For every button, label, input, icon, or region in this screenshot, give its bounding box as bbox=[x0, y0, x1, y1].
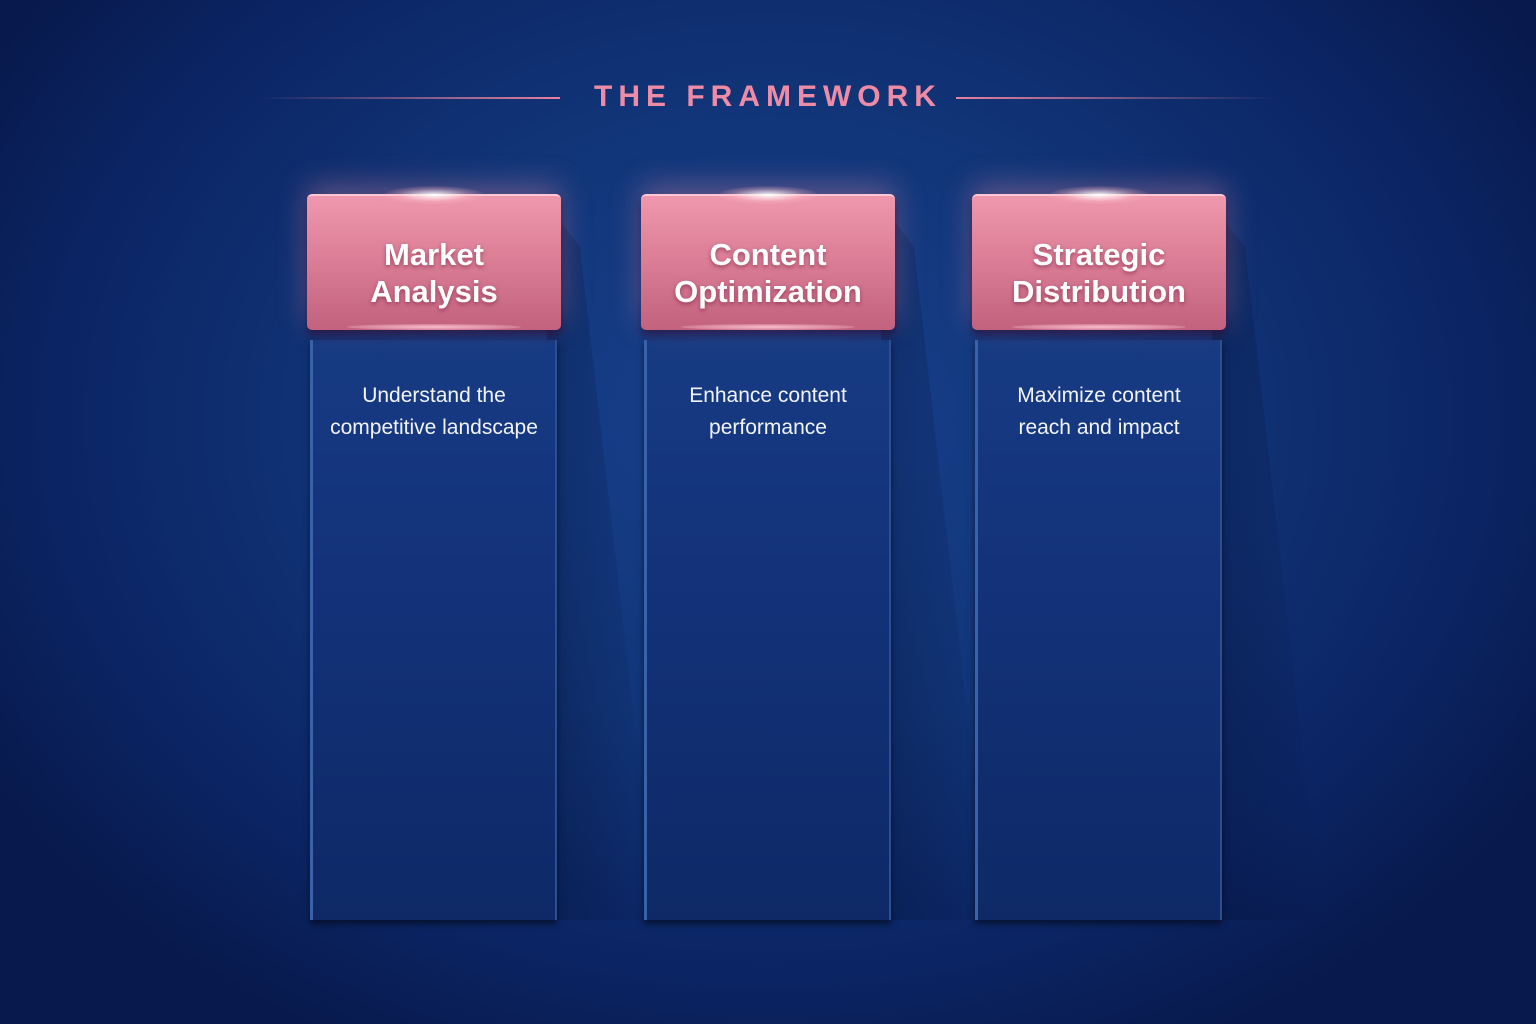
header: content optimization: Content bbox=[709, 237, 827, 272]
header: market analysis: Analysis bbox=[370, 274, 498, 309]
body: market analysis bbox=[310, 340, 557, 920]
body: strategic distribution: Maximize content bbox=[1017, 384, 1181, 407]
title line right bbox=[956, 97, 1276, 99]
header: market analysis bbox=[307, 194, 561, 330]
header: strategic distribution: Strategic bbox=[1033, 237, 1165, 272]
body: strategic distribution: reach and impact bbox=[1018, 416, 1180, 439]
header: strategic distribution bbox=[972, 194, 1226, 330]
title: THE FRAMEWORK bbox=[594, 80, 942, 113]
panel: strategic distribution bbox=[954, 168, 1274, 927]
header: strategic distribution: Distribution bbox=[1012, 274, 1186, 309]
body: market analysis: competitive landscape bbox=[330, 416, 538, 439]
header: content optimization bbox=[641, 194, 895, 330]
body: content optimization bbox=[644, 340, 891, 920]
title line left bbox=[260, 97, 560, 99]
body: content optimization: performance bbox=[709, 416, 827, 439]
header: market analysis: Market bbox=[384, 237, 484, 272]
panel: market analysis bbox=[289, 168, 618, 927]
body: strategic distribution bbox=[975, 340, 1222, 920]
body: market analysis: Understand the bbox=[362, 384, 506, 407]
body: content optimization: Enhance content bbox=[689, 384, 847, 407]
panel: content optimization bbox=[623, 168, 952, 927]
header: content optimization: Optimization bbox=[674, 274, 862, 309]
